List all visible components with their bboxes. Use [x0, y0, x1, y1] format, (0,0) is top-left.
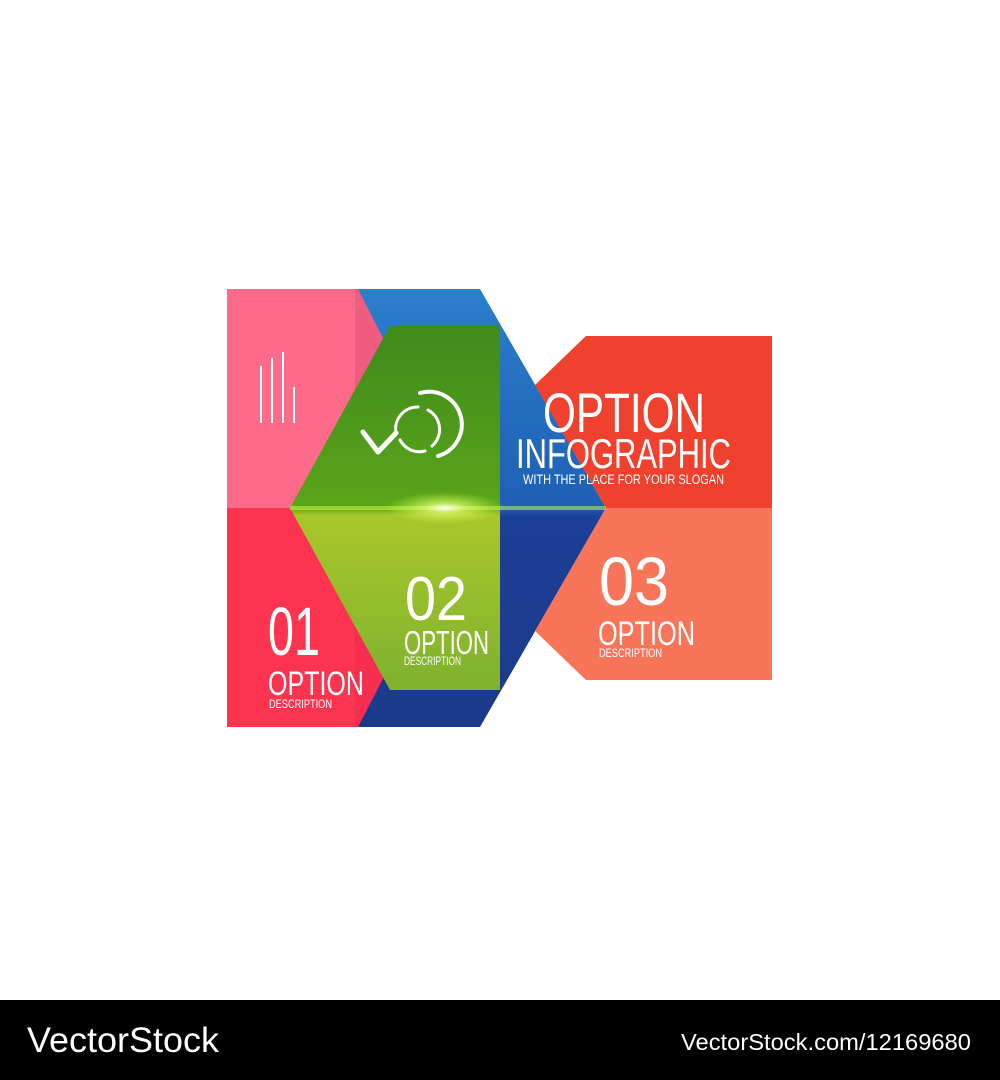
option 01: DESCRIPTION — [269, 697, 332, 711]
title block: INFOGRAPHIC — [516, 430, 731, 477]
footer bar: VectorStock.com/12169680 — [681, 1029, 971, 1055]
panel: blue chevron — [355, 289, 606, 727]
option 03: 03 — [599, 543, 669, 620]
option 03 — [598, 543, 695, 660]
footer bar — [0, 1000, 1000, 1080]
panel: salmon bottom right — [535, 508, 772, 680]
option 03: OPTION — [598, 615, 695, 653]
title block: OPTION — [543, 381, 705, 444]
option 01: OPTION — [268, 665, 364, 703]
footer bar: VectorStock — [27, 1021, 220, 1060]
icon: refresh arrow — [363, 392, 462, 456]
icon: bar lines — [261, 352, 294, 423]
option 02: OPTION — [404, 624, 489, 661]
option 02: DESCRIPTION — [404, 654, 461, 668]
title block — [516, 381, 731, 487]
title block: WITH THE PLACE FOR YOUR SLOGAN — [523, 471, 724, 487]
option 03: DESCRIPTION — [599, 646, 662, 660]
option 02 — [404, 565, 489, 668]
panel: pink top left — [227, 289, 385, 508]
panel: red top right — [535, 336, 772, 508]
option 02: 02 — [405, 565, 467, 634]
panel: red bottom left — [227, 508, 385, 727]
option 01: 01 — [268, 593, 320, 670]
option 01 — [268, 593, 364, 711]
panel: green center — [290, 326, 606, 690]
